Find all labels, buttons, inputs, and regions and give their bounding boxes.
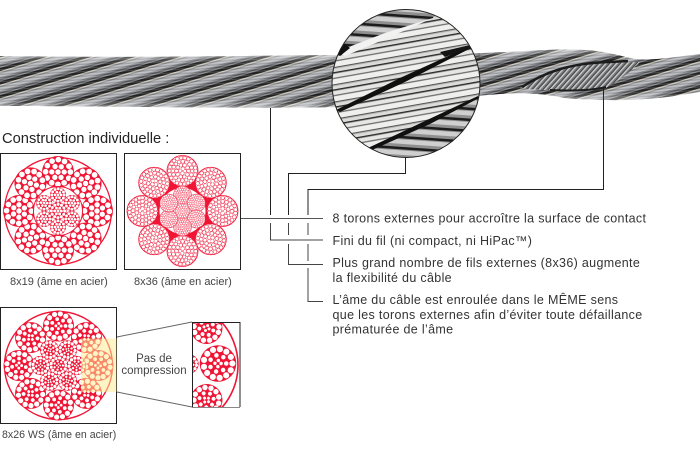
leader lines	[240, 88, 604, 302]
callout: core direction: L’âme du câble est enroulée dans le MÊME sens	[332, 292, 618, 307]
caption: 8x19: 8x19 (âme en acier)	[10, 276, 108, 288]
rope bulge: exposed strand	[520, 61, 640, 91]
caption: 8x26 WS: 8x26 WS (âme en acier)	[2, 429, 116, 441]
callout: outer strands: 8 torons externes pour accroître la surface de contact	[332, 212, 647, 226]
callout: flexibility: la flexibilité du câble	[332, 271, 452, 285]
leader: number of outer wires	[288, 157, 406, 264]
caption: 8x36: 8x36 (âme en acier)	[134, 276, 232, 288]
zoom guide lines	[117, 322, 192, 407]
leader: core direction	[308, 88, 604, 302]
label: compression pitch: Pas de	[136, 353, 172, 365]
panel: 8x19 cross-section	[0, 154, 116, 270]
leader: wire finish	[270, 108, 323, 240]
panel: 8x36 cross-section	[124, 154, 240, 270]
panel: compression detail	[192, 322, 240, 408]
wire rope photograph	[0, 49, 700, 108]
callouts	[332, 212, 647, 336]
heading: individual construction: Construction individuelle :	[2, 131, 169, 147]
magnifier: wire close-up	[332, 9, 480, 158]
leader: strands count	[240, 218, 323, 220]
callout: core direction: que les torons externes afin d’éviter toute défaillance	[332, 308, 642, 322]
callout: core direction: prématurée de l’âme	[332, 322, 453, 336]
panel: 8x26 WS cross-section	[0, 308, 116, 424]
callout: wire finish: Fini du fil (ni compact, ni HiPac™)	[332, 234, 532, 248]
label: compression pitch: compression	[121, 365, 187, 377]
compression highlight	[81, 338, 116, 392]
callout: flexibility: Plus grand nombre de fils externes (8x36) augmente	[332, 256, 640, 270]
